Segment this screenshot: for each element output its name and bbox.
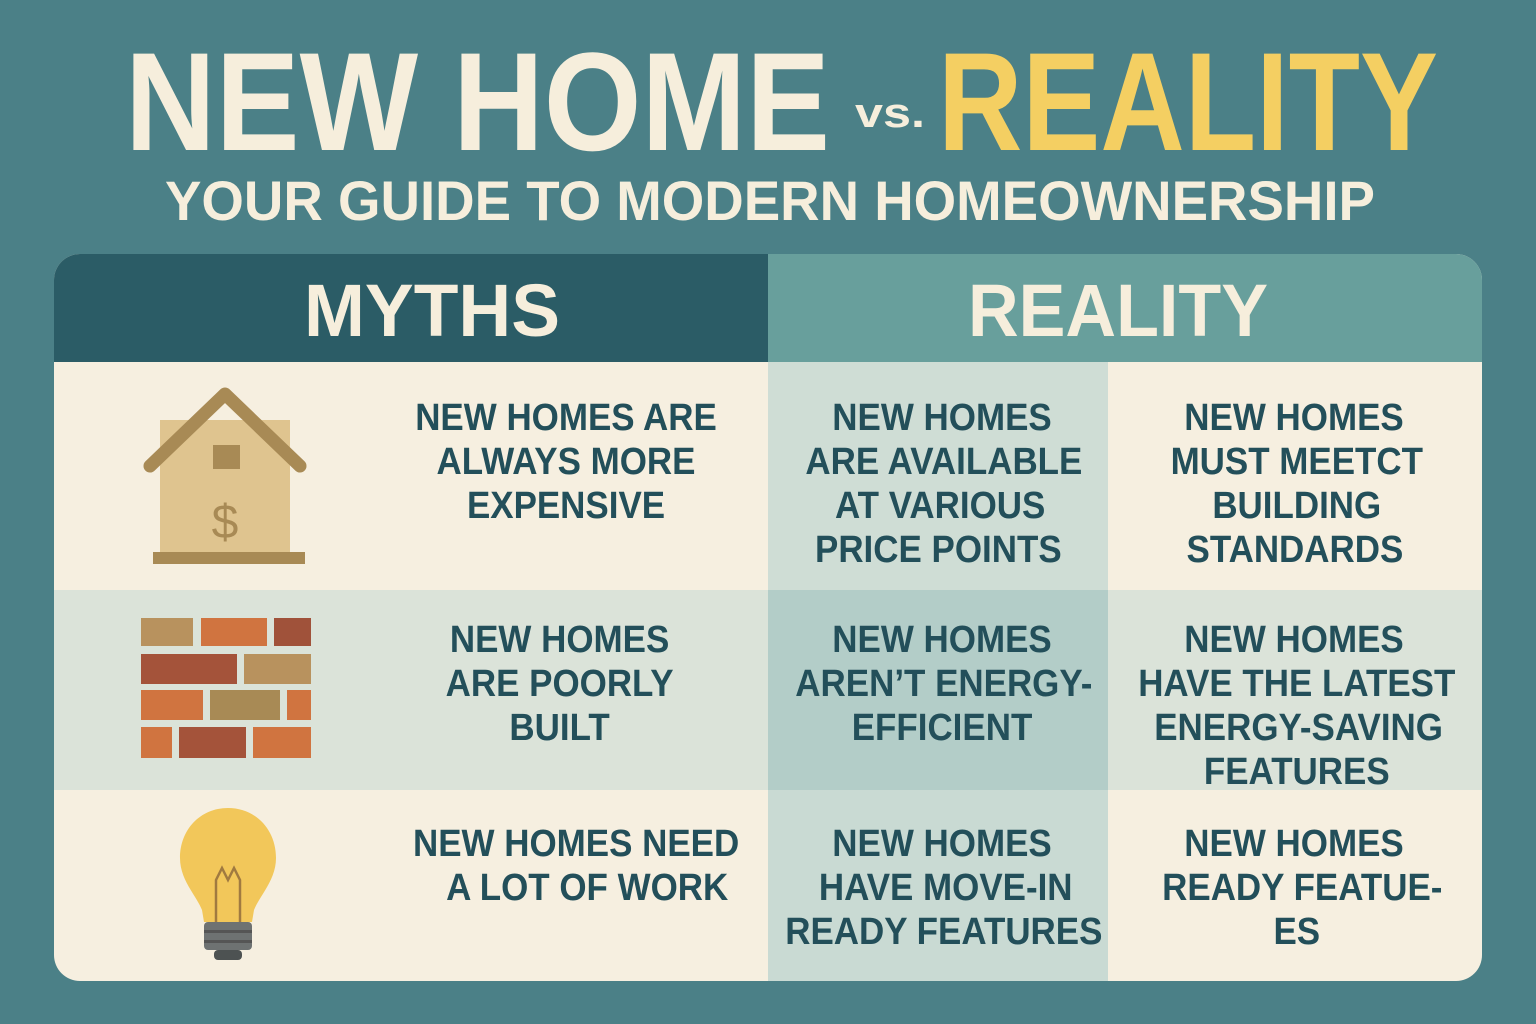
text: reality column 2: NEW HOMES — [1184, 618, 1404, 660]
text: myths — [413, 396, 739, 908]
text: reality column 1: AREN’T ENERGY- — [795, 662, 1092, 704]
icon: bricks — [141, 618, 311, 758]
title: NEW HOME — [125, 23, 830, 180]
text: reality column 2: NEW HOMES — [1184, 396, 1404, 438]
text: reality column 2 — [1138, 396, 1455, 952]
text: reality column 2: BUILDING — [1212, 484, 1381, 526]
text: myths: NEW HOMES NEED — [413, 822, 739, 864]
text: reality column 1: PRICE POINTS — [815, 528, 1062, 570]
text: reality column 1: ARE AVAILABLE — [805, 440, 1082, 482]
text: reality column 1 — [785, 396, 1102, 952]
text: myths: EXPENSIVE — [467, 484, 665, 526]
header: reality: REALITY — [968, 269, 1268, 352]
icon: house — [150, 394, 305, 564]
text: reality column 2: ES — [1273, 910, 1320, 952]
text: reality column 2: NEW HOMES — [1184, 822, 1404, 864]
title — [125, 23, 1438, 180]
text: reality column 2: MUST MEETCT — [1171, 440, 1423, 482]
text: myths: NEW HOMES — [450, 618, 669, 660]
text: reality column 1: READY FEATURES — [785, 910, 1102, 952]
text: myths: ALWAYS MORE — [437, 440, 695, 482]
header: myths — [54, 254, 768, 362]
panel: table — [54, 254, 1482, 981]
text: reality column 1: NEW HOMES — [832, 822, 1052, 864]
text: myths: ARE POORLY — [446, 662, 673, 704]
text: myths: A LOT OF WORK — [446, 866, 729, 908]
title: vs. — [855, 89, 925, 136]
header: myths: MYTHS — [304, 269, 560, 352]
text: myths: NEW HOMES ARE — [415, 396, 717, 438]
icon: light bulb — [180, 808, 276, 960]
text: reality column 1: NEW HOMES — [832, 396, 1052, 438]
text: reality column 1: EFFICIENT — [852, 706, 1032, 748]
header: reality — [768, 254, 1482, 362]
text: reality column 1: NEW HOMES — [832, 618, 1052, 660]
text: myths: BUILT — [509, 706, 610, 748]
text: reality column 2: STANDARDS — [1187, 528, 1403, 570]
icon: house: $ — [212, 496, 238, 549]
text: reality column 2: FEATURES — [1204, 750, 1390, 792]
text: reality column 2: READY FEATUE- — [1162, 866, 1442, 908]
title: REALITY — [938, 23, 1438, 180]
text: reality column 1: AT VARIOUS — [835, 484, 1045, 526]
text: reality column 1: HAVE MOVE-IN — [819, 866, 1073, 908]
text: reality column 2: HAVE THE LATEST — [1138, 662, 1455, 704]
text: reality column 2: ENERGY-SAVING — [1154, 706, 1443, 748]
subtitle: YOUR GUIDE TO MODERN HOMEOWNERSHIP — [165, 169, 1375, 232]
